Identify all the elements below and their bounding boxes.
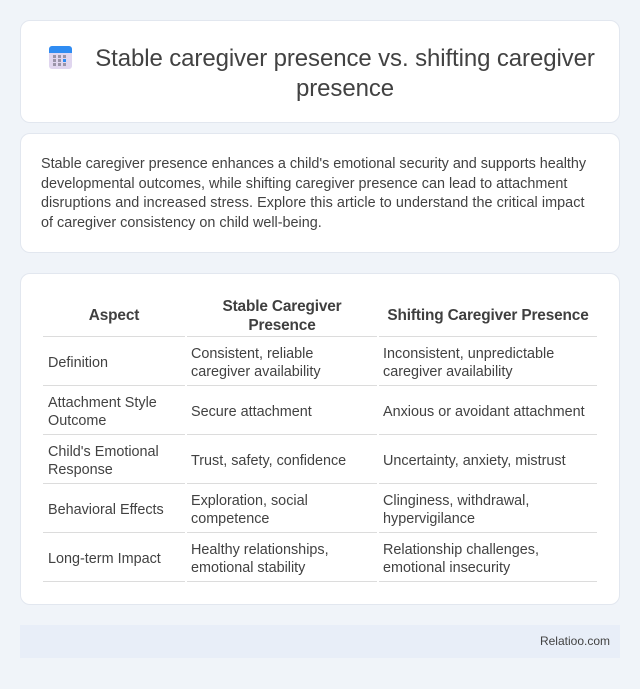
intro text: of caregiver consistency on child well-being.: [41, 214, 322, 230]
footer bar: [20, 625, 620, 658]
row: Long-term Impact: Relationship challenges,: [383, 542, 539, 558]
intro text: developmental outcomes, while shifting caregiver presence can lead to attachment: [41, 176, 567, 192]
header: Shifting Caregiver Presence: Shifting Caregiver Presence: [387, 307, 589, 324]
row: Child's Emotional Response: Uncertainty, anxiety, mistrust: [383, 453, 566, 469]
header: Aspect: Aspect: [89, 307, 139, 324]
row: Definition: caregiver availability: [383, 364, 513, 380]
row: Behavioral Effects: Behavioral Effects: [48, 502, 164, 518]
intro text: [41, 156, 586, 230]
intro text: Stable caregiver presence enhances a child's emotional security and supports healthy: [41, 156, 586, 172]
row: Attachment Style Outcome: Attachment Style: [48, 395, 157, 411]
header: Stable Caregiver Presence: Stable Caregiver: [222, 298, 342, 315]
row: Attachment Style Outcome: Secure attachment: [191, 404, 312, 420]
row: Long-term Impact: emotional insecurity: [383, 560, 510, 576]
panel: introduction: [20, 133, 620, 253]
row: Long-term Impact: Long-term Impact: [48, 551, 161, 567]
header: Stable Caregiver Presence: [222, 298, 342, 334]
row: Child's Emotional Response: Child's Emotional: [48, 444, 159, 460]
row: Long-term Impact: emotional stability: [191, 560, 305, 576]
row: Attachment Style Outcome: Anxious or avoidant attachment: [383, 404, 585, 420]
row: Definition: Definition: [48, 355, 108, 371]
header: Stable Caregiver Presence: Presence: [248, 317, 316, 334]
row: Definition: Consistent, reliable: [191, 346, 313, 362]
row: Child's Emotional Response: Response: [48, 462, 113, 478]
row: Long-term Impact: Healthy relationships,: [191, 542, 329, 558]
title: Stable caregiver presence vs. shifting caregiver presence: [95, 45, 595, 102]
row: Behavioral Effects: competence: [191, 511, 269, 527]
row: Definition: [48, 346, 554, 380]
row: Long-term Impact: [48, 542, 539, 576]
panel: title card: [20, 20, 620, 123]
panel: comparison table: [20, 273, 620, 605]
row: Definition: Inconsistent, unpredictable: [383, 346, 554, 362]
row: Child's Emotional Response: [48, 444, 566, 478]
intro text: disruptions and increased stress. Explore this article to understand the critical impact: [41, 195, 585, 211]
icon: calendar: [49, 46, 72, 69]
row: Definition: caregiver availability: [191, 364, 321, 380]
row: Behavioral Effects: Clinginess, withdrawal,: [383, 493, 529, 509]
row: Behavioral Effects: Exploration, social: [191, 493, 308, 509]
row: Attachment Style Outcome: [48, 395, 585, 429]
row: Behavioral Effects: [48, 493, 529, 527]
row: Attachment Style Outcome: Outcome: [48, 413, 106, 429]
row: Child's Emotional Response: Trust, safety, confidence: [191, 453, 346, 469]
row: Behavioral Effects: hypervigilance: [383, 511, 475, 527]
footer text: Relatioo.com: [540, 634, 610, 648]
